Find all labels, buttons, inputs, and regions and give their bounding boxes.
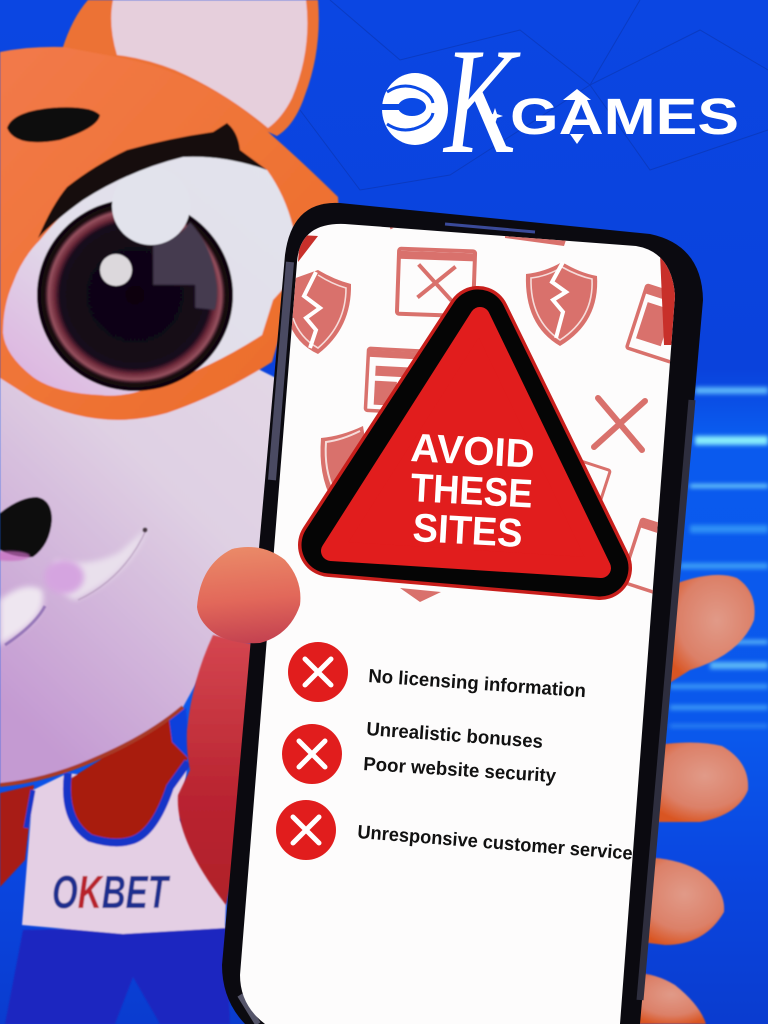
shield icon right (526, 262, 597, 346)
shirt logo: OKBET (52, 866, 171, 918)
window icon behind triangle (583, 460, 612, 500)
window icon left (364, 346, 420, 413)
hand behind phone (178, 575, 755, 1024)
list item: customer service: Unresponsive customer service (357, 822, 633, 865)
logo ring (380, 73, 448, 145)
phone (222, 203, 703, 1024)
logo wordmark: GAMES (510, 88, 739, 145)
eye (3, 123, 300, 396)
warning heading (410, 426, 536, 556)
logo: OK Games (380, 17, 739, 185)
shirt (22, 762, 226, 934)
large cross icon (594, 398, 645, 450)
list item: no licensing: No licensing information (368, 666, 587, 702)
screen background icons (288, 222, 696, 602)
warning list (276, 642, 633, 865)
shorts (5, 926, 230, 1024)
list item: customer service (276, 800, 633, 865)
shield icon left (288, 270, 351, 354)
warning heading: AVOID (410, 426, 536, 477)
mascot head (0, 70, 300, 785)
logo star (487, 108, 503, 124)
warning heading: THESE (410, 466, 534, 517)
window icon right (625, 284, 675, 364)
chin shadow (0, 707, 183, 785)
warning heading: SITES (412, 506, 524, 556)
shield icon bottom (400, 588, 441, 602)
list item: no licensing (288, 642, 587, 702)
list item: bonuses and security: Unrealistic bonuses (366, 719, 544, 753)
window icon with cross (397, 249, 475, 316)
list item: bonuses and security (282, 719, 557, 787)
shield icon lower left (320, 426, 364, 490)
warning triangle (330, 317, 601, 568)
top clipped icon (505, 236, 566, 246)
forehead marking (7, 107, 100, 142)
window icon lower right (627, 518, 658, 594)
mascot ear (62, 0, 319, 136)
orange mask (0, 47, 340, 420)
nose and mouth (0, 497, 148, 645)
logo spade accents (563, 89, 591, 144)
list item: bonuses and security: Poor website security (363, 754, 557, 787)
mascot: fox character (0, 0, 340, 1024)
phone body (222, 203, 703, 1024)
thumb (197, 547, 300, 643)
mascot body and shirt (0, 700, 230, 1024)
phone screen (240, 224, 675, 1024)
iris reflection (153, 222, 217, 310)
eyebrow (38, 123, 267, 238)
logo K: K (443, 17, 521, 185)
